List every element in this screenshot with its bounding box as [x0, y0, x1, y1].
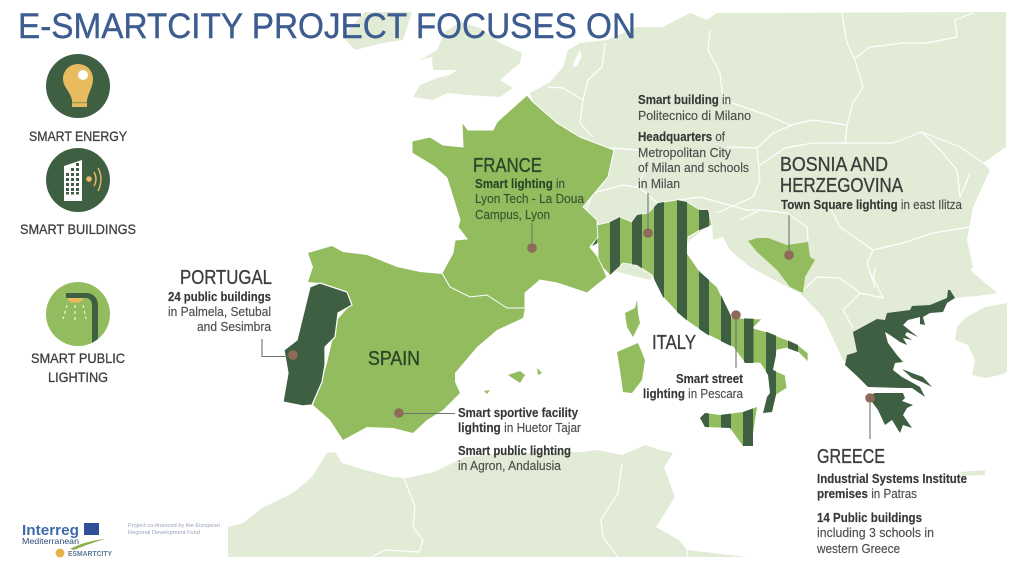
background land: Ireland [343, 12, 412, 50]
co-financing note: Regional Development Fund [128, 530, 200, 536]
callout: Milan, Italy: Metropolitan City [638, 146, 732, 160]
Corsica [625, 300, 640, 337]
callout: Milan, Italy: of Milan and schools [638, 161, 749, 175]
Spain [308, 246, 525, 440]
callout: Spain [368, 348, 581, 473]
callout: Portugal: in Palmela, Setubal [168, 305, 271, 319]
label: smart public lighting: LIGHTING [48, 369, 108, 385]
logo: Interreg Mediterranean ESMARTCITY: ESMARTCITY [68, 551, 112, 558]
Greece Evia [902, 369, 932, 387]
callout: Greece [816, 393, 967, 556]
logo: Interreg Mediterranean ESMARTCITY [22, 523, 112, 558]
label: smart public lighting [31, 350, 125, 385]
background land: North Africa [228, 445, 746, 557]
Sardinia [617, 343, 645, 393]
callout: Greece: including 3 schools in [817, 526, 934, 540]
callout: France: Campus, Lyon [475, 208, 550, 222]
callout: Italy, Pescara: lighting in Pescara [643, 387, 743, 401]
callout: Spain: Smart sportive facility [458, 406, 578, 420]
callout: Milan, Italy [638, 93, 751, 238]
callout: Portugal: and Sesimbra [197, 320, 271, 334]
callout: Spain: in Agron, Andalusia [458, 459, 561, 473]
callout: Greece: premises in Patras [817, 487, 917, 501]
callout: France: Lyon Tech - La Doua [475, 192, 584, 206]
callout: Milan, Italy: Smart building in [638, 93, 731, 107]
logo: Interreg Mediterranean ESMARTCITY: Mediterranean [22, 536, 79, 546]
callout: Greece: 14 Public buildings [817, 511, 922, 525]
callout: Portugal: PORTUGAL [180, 267, 272, 289]
France [412, 95, 614, 308]
Portugal [283, 283, 352, 406]
callout: Spain: SPAIN [368, 348, 420, 370]
Balearic islands [484, 368, 542, 394]
callout: France: Smart lighting in [475, 177, 565, 191]
callout: France: FRANCE [473, 155, 542, 177]
co-financing note [128, 523, 220, 536]
callout: Spain: Smart public lighting [458, 444, 571, 458]
icon: smart public lighting [46, 282, 110, 346]
callout: Bosnia and Herzegovina [780, 154, 962, 260]
background inlet: Netherlands coast [572, 50, 582, 67]
title: E-SMARTCITY PROJECT FOCUSES ON [18, 7, 636, 46]
background land: Crete [960, 470, 985, 476]
label: smart buildings: SMART BUILDINGS [20, 221, 136, 237]
callout: Greece: western Greece [816, 542, 900, 556]
callout: Italy, Pescara: Smart street [676, 372, 744, 386]
Greece Peloponnese [865, 393, 913, 433]
callout: Bosnia and Herzegovina: BOSNIA AND [780, 154, 888, 176]
callout: Milan, Italy: Headquarters of [638, 130, 725, 144]
Sicily [700, 407, 757, 446]
callout: Spain: lighting in Huetor Tajar [458, 421, 581, 435]
Bosnia and Herzegovina [748, 238, 815, 293]
callout: Italy, Pescara [643, 310, 744, 401]
country borders [371, 13, 983, 557]
callout: Italy, Pescara: ITALY [652, 332, 696, 354]
Greece mainland [845, 290, 955, 397]
callout: Milan, Italy: in Milan [638, 177, 680, 191]
callout: Bosnia and Herzegovina: HERZEGOVINA [780, 175, 904, 197]
background land: Britain [402, 22, 522, 100]
callout: France [473, 155, 584, 253]
Italy striped [590, 190, 808, 420]
callout: Bosnia and Herzegovina: Town Square lighting in east Ilitza [781, 198, 962, 212]
background land: Turkey [955, 303, 1007, 378]
callout: Greece: Industrial Systems Institute [817, 472, 967, 486]
co-financing note: Project co-financed by the European [128, 523, 220, 529]
callout: Portugal [168, 267, 298, 360]
label: smart energy: SMART ENERGY [29, 128, 128, 144]
map of Europe and North Africa [228, 12, 1007, 557]
callout: Greece: GREECE [817, 446, 885, 468]
icon: smart buildings [46, 148, 110, 212]
background land: mainland Europe [530, 12, 1006, 370]
icon: smart energy light bulb [46, 54, 110, 118]
callout: Milan, Italy: Politecnico di Milano [638, 109, 751, 123]
logo: Interreg Mediterranean ESMARTCITY: Interreg [22, 523, 79, 539]
label: smart public lighting: SMART PUBLIC [31, 350, 125, 366]
callout: Portugal: 24 public buildings [168, 290, 271, 304]
